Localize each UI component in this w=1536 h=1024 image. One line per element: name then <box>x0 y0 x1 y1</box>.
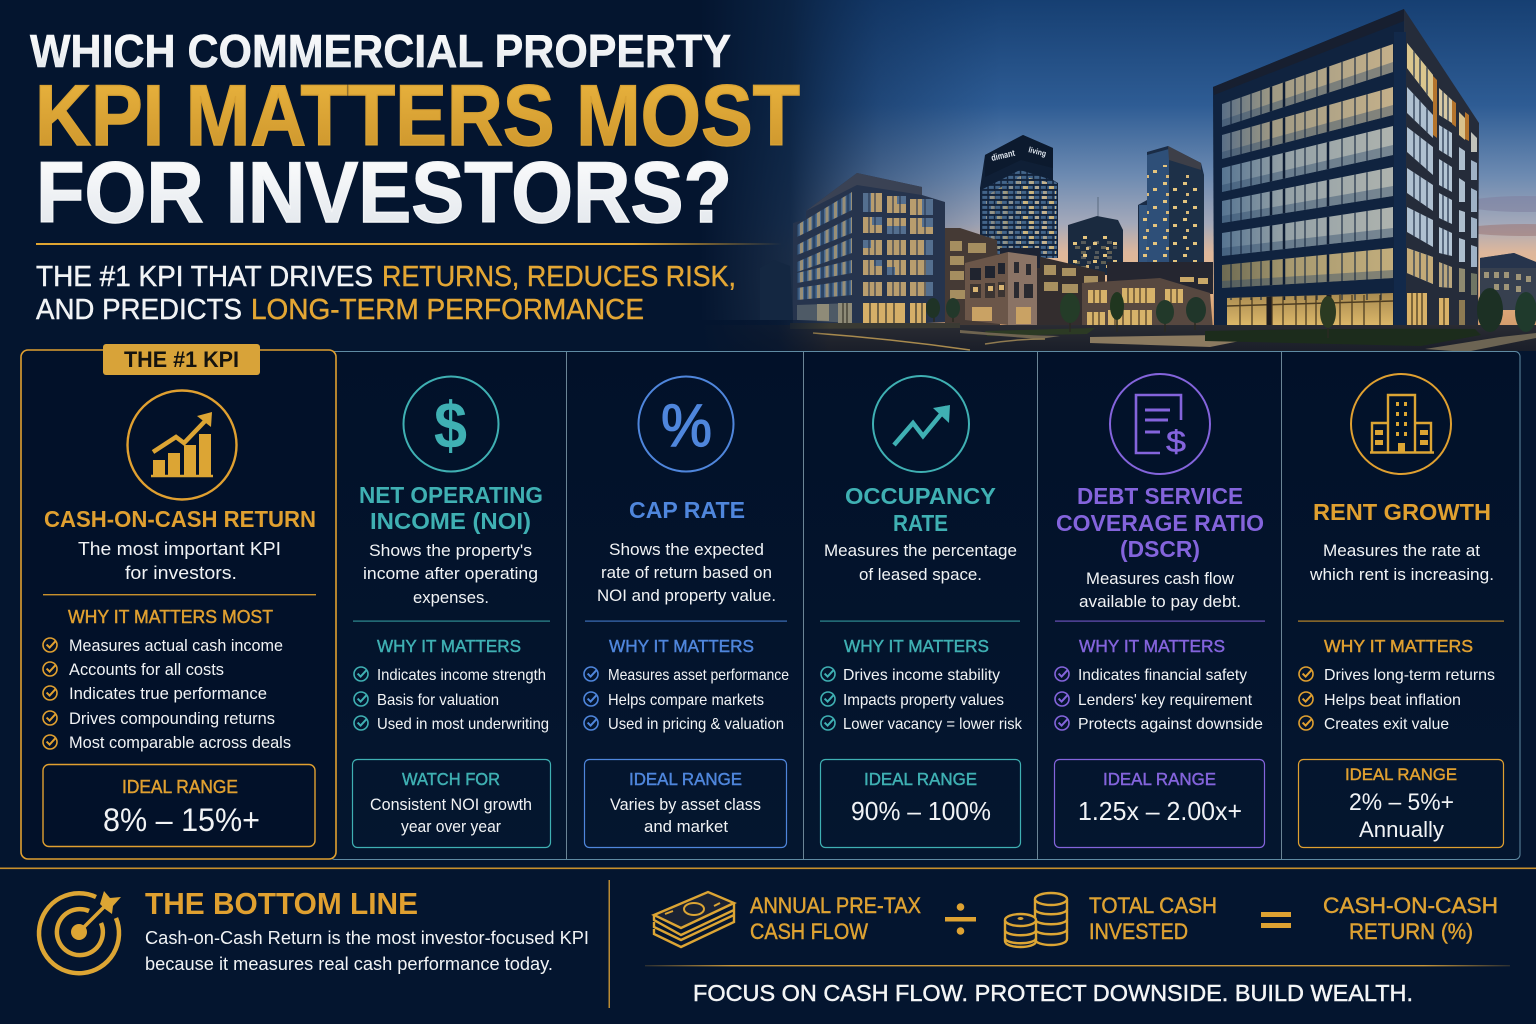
description: Shows the property's <box>369 541 532 560</box>
why it matters: Helps compare markets <box>608 692 764 709</box>
why it matters most: WHY IT MATTERS MOST <box>68 607 273 627</box>
why it matters: Drives income stability <box>843 667 1000 684</box>
description: available to pay debt. <box>1079 592 1241 611</box>
why it matters: WHY IT MATTERS <box>609 636 754 656</box>
annual pre-tax cash flow: ANNUAL PRE-TAX <box>750 893 921 918</box>
subtitle: LONG-TERM PERFORMANCE <box>251 294 644 326</box>
brown mid-rise buildings <box>945 228 1105 325</box>
ideal range box: IDEAL RANGE <box>1103 769 1216 789</box>
total cash invested <box>1089 893 1217 944</box>
icon: rising bar chart <box>128 390 236 500</box>
icon: document with dollar: $ <box>1166 424 1186 459</box>
badge: the #1 kpi <box>103 344 260 375</box>
ideal range box: and market <box>644 818 728 836</box>
why it matters: Helps beat inflation <box>1324 692 1461 709</box>
heading: COVERAGE RATIO <box>1056 510 1264 536</box>
description: NOI and property value. <box>597 586 776 605</box>
icon: coin stacks <box>1005 893 1067 947</box>
badge: the #1 kpi: THE #1 KPI <box>124 347 239 372</box>
body text: because it measures real cash performance today. <box>145 953 553 974</box>
low glass pavilion <box>1082 262 1213 330</box>
why it matters most: Measures actual cash income <box>69 637 283 655</box>
ideal range box: 90% – 100% <box>851 796 991 826</box>
annual pre-tax cash flow: CASH FLOW <box>750 919 868 944</box>
description: Measures cash flow <box>1086 569 1235 588</box>
why it matters: Protects against downside <box>1078 716 1263 733</box>
watch for box: year over year <box>401 818 501 836</box>
panel: KPI columns background <box>330 352 1520 860</box>
icon: trend arrow <box>873 376 969 472</box>
title: KPI MATTERS MOST <box>35 68 800 164</box>
main glass tower <box>1213 9 1479 337</box>
why it matters <box>1299 636 1495 733</box>
icon: target with arrow <box>39 891 121 973</box>
total cash invested: INVESTED <box>1089 919 1188 944</box>
why it matters: Lower vacancy = lower risk <box>843 716 1023 733</box>
why it matters <box>821 636 1023 733</box>
total cash invested: TOTAL CASH <box>1089 893 1217 918</box>
ideal range box: Annually <box>1359 817 1444 842</box>
heading: RATE <box>893 510 948 536</box>
description <box>597 540 776 605</box>
heading: (DSCR) <box>1120 536 1200 562</box>
heading: RENT GROWTH <box>1313 499 1491 525</box>
cash-on-cash return: RETURN (%) <box>1349 919 1473 944</box>
hero skyline photo <box>700 0 1536 355</box>
why it matters: Indicates financial safety <box>1078 667 1247 684</box>
subtitle: RETURNS, REDUCES RISK, <box>382 261 736 293</box>
ideal range box <box>1054 760 1264 848</box>
why it matters most: Drives compounding returns <box>69 710 275 728</box>
subtitle <box>36 261 736 326</box>
tower two <box>1138 146 1204 275</box>
cash-on-cash return <box>1323 893 1498 944</box>
ideal range box: 2% – 5%+ <box>1349 789 1454 816</box>
why it matters: Drives long-term returns <box>1324 667 1495 684</box>
why it matters: WHY IT MATTERS <box>1079 636 1225 656</box>
body text <box>145 927 589 974</box>
watch for box: Consistent NOI growth <box>370 796 532 814</box>
icon: buildings <box>1351 374 1451 474</box>
why it matters most <box>43 607 291 752</box>
why it matters: Creates exit value <box>1324 716 1449 733</box>
description <box>1079 569 1241 611</box>
tower one: living <box>1028 145 1047 158</box>
description: which rent is increasing. <box>1309 565 1494 584</box>
description <box>824 541 1017 584</box>
small tower <box>1068 197 1123 275</box>
heading: CASH-ON-CASH RETURN <box>44 506 316 532</box>
ideal range box: IDEAL RANGE <box>629 769 742 789</box>
heading: INCOME (NOI) <box>370 508 531 534</box>
street and trees <box>700 288 1536 352</box>
description: Measures the rate at <box>1323 541 1480 560</box>
ideal range box <box>584 760 786 848</box>
watch for box <box>352 760 550 848</box>
why it matters <box>584 636 789 733</box>
subtitle: AND PREDICTS <box>36 294 242 326</box>
description: The most important KPI <box>78 538 281 559</box>
panel: net operating income <box>352 376 550 848</box>
why it matters: WHY IT MATTERS <box>377 636 521 656</box>
tower one: dimant <box>990 148 1016 163</box>
icon: dollar <box>404 376 498 472</box>
left office block <box>793 173 945 327</box>
icon: dollar: $ <box>434 388 467 462</box>
ideal range box <box>43 764 315 846</box>
ideal range box: 8% – 15%+ <box>103 802 260 838</box>
description: income after operating <box>363 564 538 583</box>
heading: THE BOTTOM LINE <box>145 886 418 921</box>
description: expenses. <box>413 588 489 607</box>
annual pre-tax cash flow <box>750 893 921 944</box>
equals sign <box>1261 912 1291 928</box>
description: Shows the expected <box>609 540 764 559</box>
panel: cash-on-cash return <box>21 344 336 859</box>
heading: NET OPERATING <box>359 482 543 508</box>
icon: document with dollar <box>1110 374 1210 474</box>
icon: stack of cash <box>654 892 734 947</box>
why it matters <box>1055 636 1263 733</box>
heading: CAP RATE <box>629 497 745 523</box>
why it matters <box>354 636 549 733</box>
panel: the bottom line <box>39 886 589 974</box>
why it matters: WHY IT MATTERS <box>844 636 989 656</box>
why it matters: Measures asset performance <box>608 667 789 684</box>
ideal range box: IDEAL RANGE <box>864 769 977 789</box>
why it matters: Basis for valuation <box>377 692 499 709</box>
ideal range box <box>1298 760 1504 848</box>
description <box>1309 541 1494 584</box>
why it matters: Lenders' key requirement <box>1078 692 1253 709</box>
description <box>363 541 538 607</box>
panel: formula <box>654 892 1498 947</box>
why it matters most: Indicates true performance <box>69 685 267 703</box>
heading <box>845 483 996 536</box>
why it matters: Impacts property values <box>843 692 1004 709</box>
watch for box: WATCH FOR <box>402 769 500 789</box>
description: rate of return based on <box>601 563 772 582</box>
ideal range box: Varies by asset class <box>610 796 761 814</box>
why it matters: WHY IT MATTERS <box>1324 636 1473 656</box>
why it matters most: Accounts for all costs <box>69 661 224 679</box>
title <box>30 25 800 241</box>
ideal range box: 1.25x – 2.00x+ <box>1078 796 1242 826</box>
panel: rent growth <box>1298 374 1504 848</box>
heading <box>1056 483 1264 562</box>
why it matters: Used in most underwriting <box>377 716 549 733</box>
heading: OCCUPANCY <box>845 483 996 509</box>
description <box>78 538 281 583</box>
icon: percent <box>638 376 734 472</box>
description: of leased space. <box>859 565 982 584</box>
subtitle: THE #1 KPI THAT DRIVES <box>36 261 373 293</box>
description: for investors. <box>125 562 237 583</box>
tagline: FOCUS ON CASH FLOW. PROTECT DOWNSIDE. BUILD WEALTH. <box>693 980 1413 1006</box>
divide sign <box>945 903 976 935</box>
heading <box>359 482 543 534</box>
description: Measures the percentage <box>824 541 1017 560</box>
body text: Cash-on-Cash Return is the most investor-focused KPI <box>145 927 589 948</box>
ideal range box <box>820 760 1020 848</box>
title: FOR INVESTORS? <box>36 145 732 241</box>
why it matters most: Most comparable across deals <box>69 734 291 752</box>
icon: percent: % <box>661 392 712 459</box>
heading: DEBT SERVICE <box>1077 483 1243 509</box>
panel: occupancy rate <box>820 376 1023 848</box>
tower one <box>980 135 1058 260</box>
panel: debt service coverage ratio <box>1054 374 1265 848</box>
panel: cap rate <box>584 376 789 848</box>
ideal range box: IDEAL RANGE <box>122 777 238 797</box>
why it matters: Indicates income strength <box>377 667 546 684</box>
ideal range box: IDEAL RANGE <box>1345 765 1457 784</box>
cash-on-cash return: CASH-ON-CASH <box>1323 893 1498 918</box>
why it matters: Used in pricing & valuation <box>608 716 784 733</box>
title: WHICH COMMERCIAL PROPERTY <box>30 25 731 77</box>
far background buildings <box>760 253 1536 320</box>
